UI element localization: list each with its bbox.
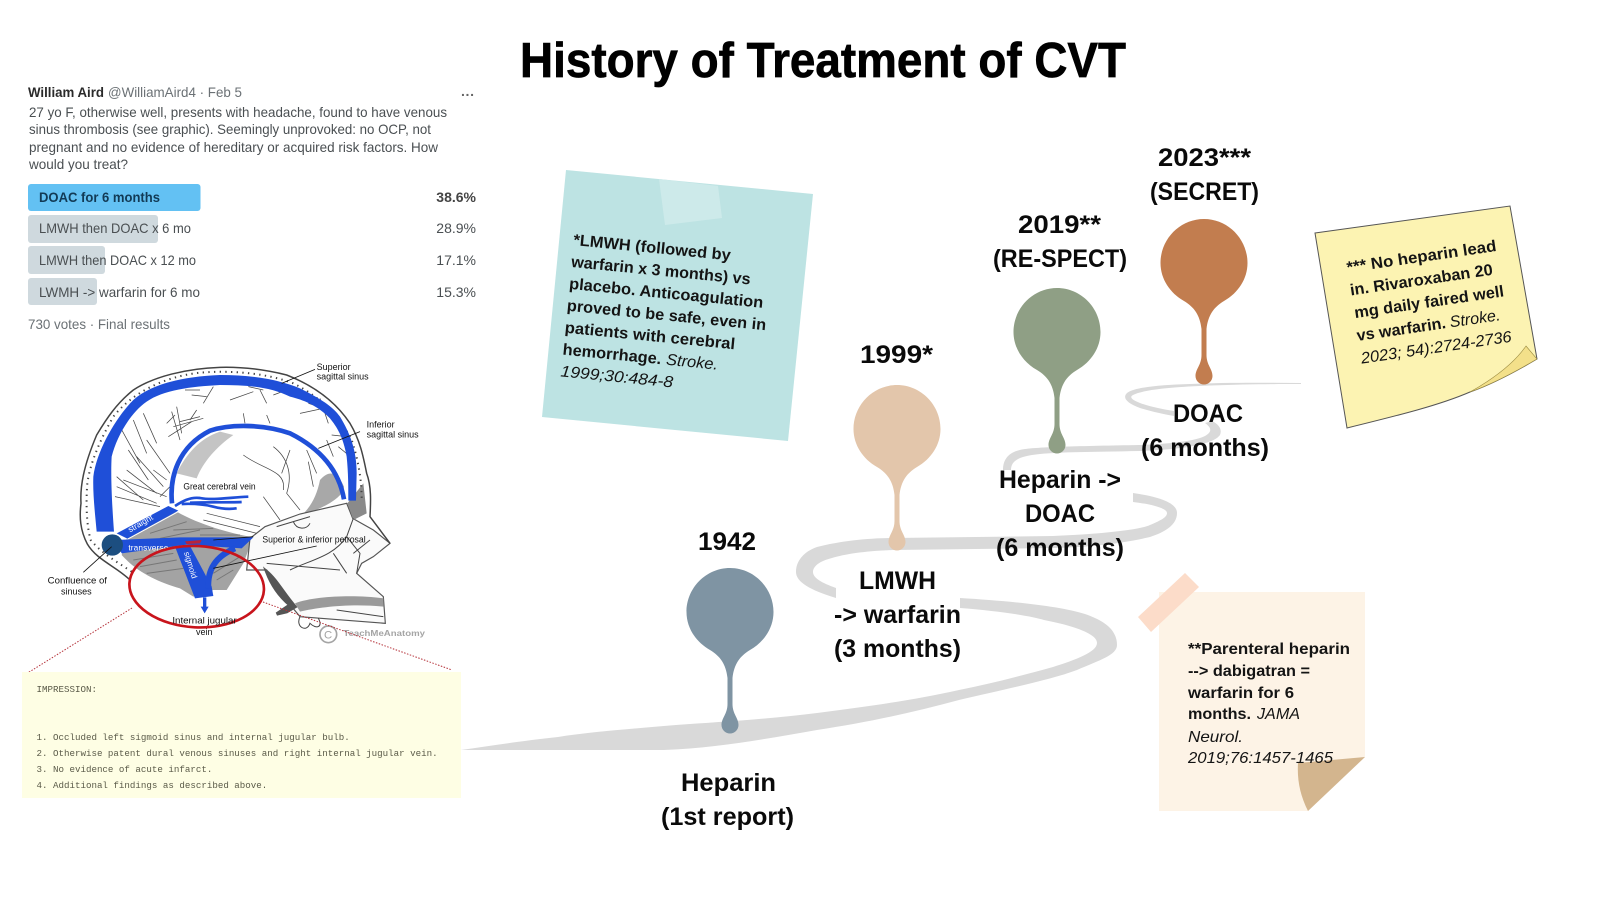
poll option 3 — [28, 246, 476, 274]
label: 2019 RE-SPECT: (RE-SPECT) — [993, 245, 1127, 273]
panel: radiology impression: 3. No evidence of acute infarct. — [36, 764, 212, 775]
watermark: TeachMeAnatomy — [343, 628, 425, 638]
note text: proved to be safe, even in — [566, 298, 767, 334]
confluence of sinuses — [102, 534, 123, 556]
cortical vein sketches — [115, 387, 348, 533]
folded corner — [1298, 757, 1365, 811]
watermark: C — [324, 629, 332, 641]
straight sinus: straight — [126, 512, 155, 534]
transverse sinus: transverse — [128, 543, 169, 553]
transverse sinus — [115, 537, 253, 553]
zoom connector lines — [26, 602, 452, 674]
poll option 1: DOAC for 6 months — [39, 189, 160, 205]
lower skull shading — [300, 473, 344, 517]
tweet author — [28, 83, 474, 100]
great cerebral vein — [175, 497, 248, 509]
panel: radiology impression — [22, 672, 461, 798]
thrombosis marker ellipse — [127, 543, 266, 631]
facial bones — [247, 483, 390, 628]
inferior sagittal sinus — [172, 426, 344, 503]
milestone pin: 1999 — [854, 385, 940, 550]
label: 1999 year: 1999* — [860, 341, 933, 369]
curled corner — [1470, 346, 1537, 392]
note text — [559, 232, 773, 400]
superior sagittal sinus — [93, 375, 357, 532]
note text: Stroke. — [1449, 307, 1502, 331]
title: History of Treatment of CVT — [520, 34, 1126, 88]
anatomical labels: Inferior — [367, 420, 395, 430]
panel: radiology impression: 2. Otherwise patent dural venous sinuses and right internal jugular vein. — [36, 748, 438, 759]
label: 1942 year: 1942 — [698, 528, 756, 556]
tweet body: sinus thrombosis (see graphic). Seemingly unprovoked: no OCP, not — [29, 121, 431, 137]
anatomical labels: Superior & inferior petrosal — [262, 535, 366, 545]
anatomical labels: Great cerebral vein — [183, 482, 256, 492]
note text: mg daily faired well — [1353, 283, 1505, 322]
note text: vs warfarin. — [1356, 315, 1447, 345]
label: 2023 SECRET — [1150, 144, 1259, 206]
tape — [1138, 573, 1199, 632]
note text: warfarin for 6 — [1187, 685, 1294, 702]
sigmoid sinus — [175, 546, 235, 598]
poll option 1 — [28, 184, 477, 211]
tweet author: ... — [461, 83, 474, 99]
note text: 1999;30:484-8 — [560, 363, 674, 391]
anatomical labels — [48, 362, 419, 637]
poll option 2 — [28, 215, 476, 243]
note text: JAMA — [1256, 706, 1300, 723]
skull outline — [80, 367, 390, 580]
panel: twitter poll — [28, 83, 477, 332]
note text — [1346, 238, 1513, 368]
panel: radiology impression: 4. Additional findings as described above. — [36, 780, 267, 791]
milestone pin: 2019 — [1014, 288, 1100, 454]
sigmoid sinus: sigmoid — [182, 551, 199, 580]
illustration: skull with venous sinuses — [48, 362, 425, 643]
label: DOAC six months — [1141, 400, 1269, 462]
tape — [659, 179, 722, 225]
poll option 3: 17.1% — [436, 252, 476, 268]
label: LMWH to warfarin: (3 months) — [834, 635, 961, 663]
tweet body: pregnant and no evidence of hereditary or acquired risk factors. How — [29, 139, 439, 155]
tentorium shading — [122, 512, 253, 597]
anatomical labels: sagittal sinus — [367, 430, 419, 440]
label: 2019 RE-SPECT — [993, 211, 1127, 273]
poll option 4: LWMH -> warfarin for 6 mo — [39, 284, 200, 300]
label: 2023 SECRET: (SECRET) — [1150, 178, 1259, 206]
anatomical labels: Internal jugular — [172, 615, 237, 625]
poll option 4 — [28, 278, 476, 305]
label: DOAC six months: (6 months) — [1141, 434, 1269, 462]
panel: yellow sticky note — [1315, 206, 1537, 428]
note text: hemorrhage. — [562, 342, 662, 368]
note text: 2019;76:1457-1465 — [1187, 750, 1333, 767]
note text: months. — [1188, 706, 1251, 723]
brain shading — [177, 432, 233, 478]
label: LMWH to warfarin: LMWH — [859, 567, 936, 595]
anatomical labels: sagittal sinus — [317, 372, 369, 382]
note text — [1187, 641, 1350, 767]
anatomical labels: Superior — [317, 362, 351, 372]
poll option 2: LMWH then DOAC x 6 mo — [39, 220, 191, 236]
leader lines — [83, 369, 360, 572]
panel: radiology impression: 1. Occluded left sigmoid sinus and internal jugular bulb. — [36, 732, 350, 743]
tweet author: @WilliamAird4 · Feb 5 — [108, 84, 242, 100]
poll option 3: LMWH then DOAC x 12 mo — [39, 252, 196, 268]
label: 2023 SECRET: 2023*** — [1158, 144, 1251, 172]
label: heparin first report — [661, 769, 794, 831]
note text: *LMWH (followed by — [573, 232, 732, 264]
note text: warfarin x 3 months) vs — [569, 254, 751, 288]
note text: Stroke. — [665, 352, 719, 374]
poll option 2: 28.9% — [436, 220, 476, 236]
panel: teal sticky note — [542, 170, 813, 441]
note text: Neurol. — [1188, 729, 1243, 746]
tweet body: would you treat? — [28, 156, 128, 172]
note text: **Parenteral heparin — [1188, 641, 1350, 658]
anatomical labels: Confluence of — [48, 576, 108, 586]
label: heparin to DOAC: (6 months) — [996, 534, 1124, 562]
note text: --> dabigatran = — [1188, 663, 1310, 680]
note text: *** No heparin lead — [1346, 238, 1497, 277]
anatomical labels: vein — [196, 627, 212, 637]
panel: radiology impression: IMPRESSION: — [36, 684, 97, 695]
poll option 1: 38.6% — [436, 189, 477, 205]
timeline road — [461, 383, 1301, 750]
label: heparin first report: (1st report) — [661, 803, 794, 831]
note text: 2023; 54):2724-2736 — [1359, 329, 1513, 368]
tentorium hatching — [133, 522, 240, 580]
label: LMWH to warfarin: -> warfarin — [834, 601, 961, 629]
straight sinus — [117, 506, 180, 539]
note text: patients with cerebral — [564, 320, 736, 353]
tweet body: 27 yo F, otherwise well, presents with headache, found to have venous — [29, 104, 447, 120]
anatomical labels: sinuses — [61, 586, 92, 596]
jugular arrow — [201, 597, 209, 613]
label: heparin to DOAC: Heparin -> — [999, 466, 1121, 494]
label: heparin to DOAC — [996, 466, 1124, 562]
label: heparin first report: Heparin — [681, 769, 776, 797]
label: 2019 RE-SPECT: 2019** — [1018, 211, 1101, 239]
label: DOAC six months: DOAC — [1173, 400, 1243, 428]
label: LMWH to warfarin — [834, 567, 961, 663]
vote count: 730 votes · Final results — [28, 316, 170, 332]
panel: peach sticky note — [1138, 573, 1365, 811]
watermark — [320, 626, 425, 643]
label: heparin to DOAC: DOAC — [1025, 500, 1095, 528]
tweet author: William Aird — [28, 84, 104, 100]
note text: in. Rivaroxaban 20 — [1349, 262, 1494, 299]
poll option 4: 15.3% — [436, 284, 476, 300]
milestone pin: 1942 — [686, 568, 774, 734]
milestone pin: 2023 — [1160, 219, 1248, 384]
note text: placebo. Anticoagulation — [568, 276, 764, 312]
tweet body — [28, 104, 447, 172]
